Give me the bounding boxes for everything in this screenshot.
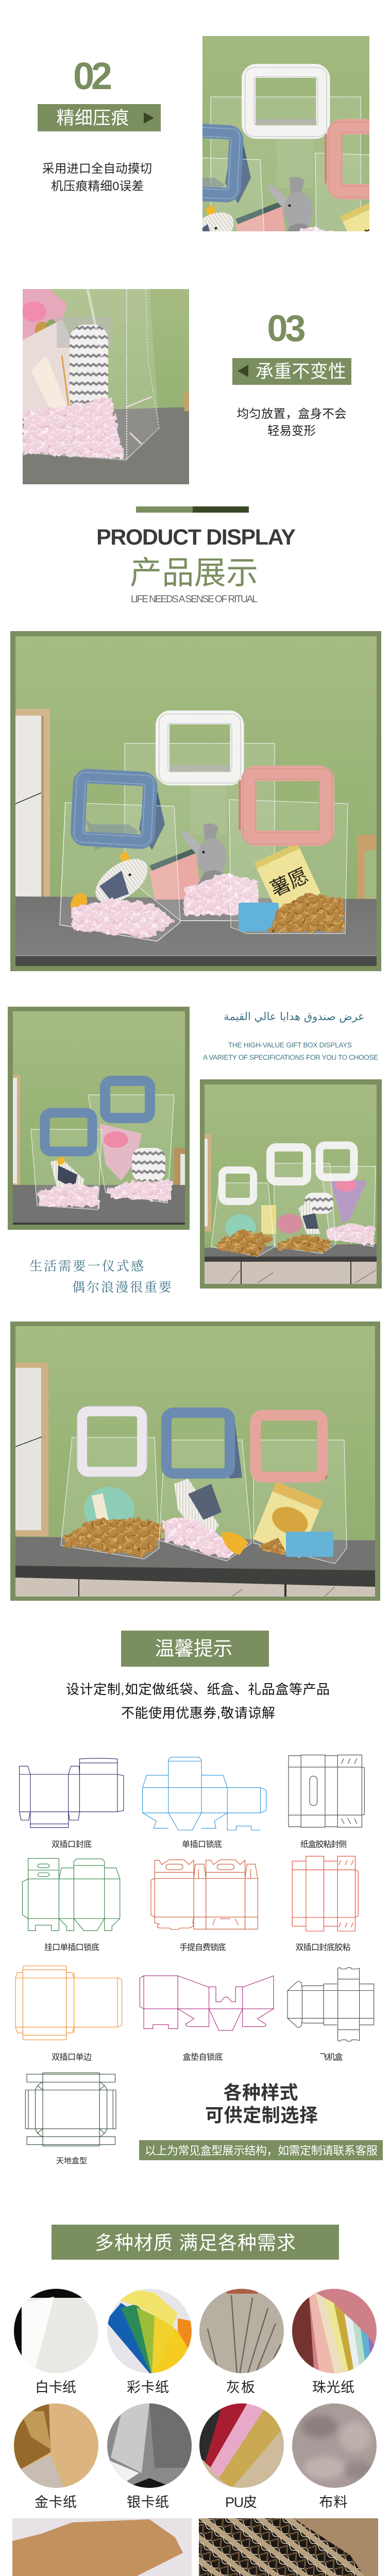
description text: 均匀放置，盒身不会 bbox=[237, 407, 346, 420]
pink gift box and bunny bbox=[149, 823, 229, 900]
photo frame: three bags on shelf bbox=[10, 631, 381, 971]
blue bag bbox=[159, 1413, 251, 1561]
banner: 精细压痕: 精细压痕 bbox=[57, 108, 129, 128]
yellow biscuit box bbox=[254, 843, 320, 913]
label: 飞机盒 bbox=[319, 2053, 343, 2062]
banner: 承重不变性 bbox=[232, 358, 351, 385]
plush duck bbox=[67, 850, 156, 916]
tips text: 设计定制,如定做纸袋、纸盒、礼品盒等产品 bbox=[66, 1682, 330, 1697]
description text: 机压痕精细0误差 bbox=[51, 179, 144, 193]
back edge of bag base bbox=[180, 920, 229, 921]
material: PU皮: PU皮 bbox=[225, 2495, 257, 2510]
blue handle front bbox=[74, 772, 155, 846]
label: 挂口单插口锁底 bbox=[44, 1943, 99, 1952]
label: 双插口封底胶粘 bbox=[296, 1943, 350, 1952]
slogan: 偶尔浪漫很重要 bbox=[72, 1280, 172, 1295]
material: 金卡纸: 金卡纸 bbox=[35, 2495, 77, 2510]
photo frame: three white bags bbox=[200, 1079, 382, 1289]
custom style note bbox=[139, 2082, 383, 2160]
back pink shred bbox=[184, 873, 259, 915]
shelf bbox=[15, 896, 377, 966]
label: 单插口锁底 bbox=[182, 1840, 222, 1849]
dieline: 纸盒胶粘封侧 bbox=[289, 1755, 364, 1827]
right bag: pink handle bbox=[229, 769, 348, 934]
headline: 可供定制选择 bbox=[205, 2105, 318, 2126]
dieline: 双插口封底胶粘 bbox=[292, 1856, 358, 1931]
title accent bar bbox=[136, 506, 249, 513]
feature 02 photo: handle close-up bbox=[202, 36, 369, 231]
material: 彩卡纸 bbox=[106, 2287, 192, 2395]
feature 02: precise creasing bbox=[38, 55, 161, 193]
subtitle: LIFE NEEDS A SENSE OF RITUAL bbox=[131, 594, 258, 605]
gold shredded paper bbox=[268, 893, 344, 933]
banner: 精细压痕 bbox=[38, 104, 161, 131]
English caption bbox=[203, 1041, 378, 1061]
dieline: 天地盒型 bbox=[25, 2073, 116, 2146]
English caption: A VARIETY OF SPECIFICATIONS FOR YOU TO CHOOSE bbox=[203, 1054, 378, 1061]
material: 彩卡纸: 彩卡纸 bbox=[127, 2380, 169, 2395]
description text bbox=[237, 407, 346, 437]
material: 白卡纸: 白卡纸 bbox=[35, 2380, 76, 2395]
photo frame: two blue bags bbox=[8, 1007, 190, 1230]
material: 金卡纸 bbox=[14, 2403, 99, 2510]
material: 珠光纸 bbox=[292, 2287, 377, 2395]
material: 银卡纸 bbox=[107, 2403, 192, 2510]
label: 双插口封底 bbox=[52, 1840, 92, 1849]
banner: 承重不变性: 承重不变性 bbox=[256, 362, 346, 382]
label: 盒垫自锁底 bbox=[182, 2053, 223, 2062]
feature 03: load bearing bbox=[232, 308, 351, 437]
banner: 温馨提示 bbox=[121, 1631, 269, 1667]
back bag: white handle bbox=[125, 714, 275, 921]
material: 灰板 bbox=[199, 2287, 284, 2395]
label: 纸盒胶粘封侧 bbox=[300, 1840, 347, 1849]
photo scene bbox=[15, 636, 377, 966]
material: 珠光纸: 珠光纸 bbox=[312, 2380, 354, 2395]
dieline: 单插口锁底 bbox=[143, 1757, 266, 1830]
shelf and cabinet bbox=[15, 1537, 375, 1597]
dieline: 双插口单边 bbox=[15, 1966, 122, 2040]
photo frame: white, blue and pink bags bbox=[10, 1321, 380, 1601]
English caption: THE HIGH-VALUE GIFT BOX DISPLAYS bbox=[228, 1041, 352, 1049]
material grid bbox=[12, 2287, 378, 2576]
yellow biscuit box: 薯愿 bbox=[267, 865, 312, 901]
material: 布料: 布料 bbox=[319, 2495, 347, 2510]
dieline: 盒垫自锁底 bbox=[140, 1976, 274, 2030]
dieline: 飞机盒 bbox=[287, 1968, 374, 2041]
banner: materials: 多种材质 满足各种需求 bbox=[95, 2232, 296, 2253]
pink bag bbox=[253, 1414, 347, 1564]
wall frames bbox=[15, 709, 376, 910]
dieline: 双插口封底 bbox=[20, 1758, 124, 1827]
left bag: blue handle bbox=[60, 772, 180, 941]
headline: 各种样式 bbox=[224, 2082, 298, 2103]
notice: warm tips bbox=[66, 1631, 330, 1721]
tips text: 不能使用优惠券,敬请谅解 bbox=[121, 1705, 275, 1721]
Chinese heading: 产品展示 bbox=[130, 555, 258, 591]
label: 天地盒型 bbox=[56, 2157, 87, 2165]
dieline: 手提自费锁底 bbox=[151, 1860, 258, 1929]
blue toy box bbox=[239, 903, 279, 931]
banner: 温馨提示: 温馨提示 bbox=[155, 1638, 233, 1660]
wall frame bbox=[15, 1363, 48, 1536]
pink shredded paper bbox=[70, 899, 174, 937]
number 03: 03 bbox=[267, 308, 306, 349]
label: 双插口单边 bbox=[52, 2053, 92, 2062]
headline bbox=[205, 2082, 318, 2126]
banner: contact note bbox=[139, 2140, 383, 2160]
material: PU皮 bbox=[199, 2403, 284, 2510]
box dieline grid bbox=[15, 1755, 374, 2165]
feature 03 photo: bag detail bbox=[23, 289, 189, 484]
material: 牛皮纸 bbox=[12, 2518, 192, 2576]
label: 手提自费锁底 bbox=[179, 1943, 226, 1952]
Arabic caption: عرض صندوق هدايا عالي القيمة bbox=[224, 1010, 365, 1023]
slogan bbox=[29, 1259, 172, 1295]
slogan: 生活需要一仪式感 bbox=[29, 1259, 144, 1274]
material: 布料 bbox=[292, 2403, 377, 2510]
banner: materials bbox=[52, 2225, 339, 2260]
description text bbox=[42, 162, 152, 193]
section title: product display bbox=[96, 506, 296, 605]
dieline: 挂口单插口锁底 bbox=[22, 1858, 120, 1930]
English heading: PRODUCT DISPLAY bbox=[96, 525, 296, 550]
tips text bbox=[66, 1682, 330, 1721]
description text: 轻易变形 bbox=[267, 424, 316, 437]
material: 银卡纸: 银卡纸 bbox=[127, 2495, 169, 2510]
material: 瓦楞纸 bbox=[199, 2518, 378, 2576]
material: 白卡纸 bbox=[14, 2287, 99, 2395]
number 02: 02 bbox=[73, 55, 112, 97]
white bag bbox=[61, 1406, 166, 1559]
pink handle front bbox=[243, 769, 332, 844]
description text: 采用进口全自动摸切 bbox=[42, 162, 152, 175]
material: 灰板: 灰板 bbox=[226, 2380, 255, 2395]
banner: contact note: 以上为常见盒型展示结构，如需定制请联系客服 bbox=[145, 2144, 378, 2157]
